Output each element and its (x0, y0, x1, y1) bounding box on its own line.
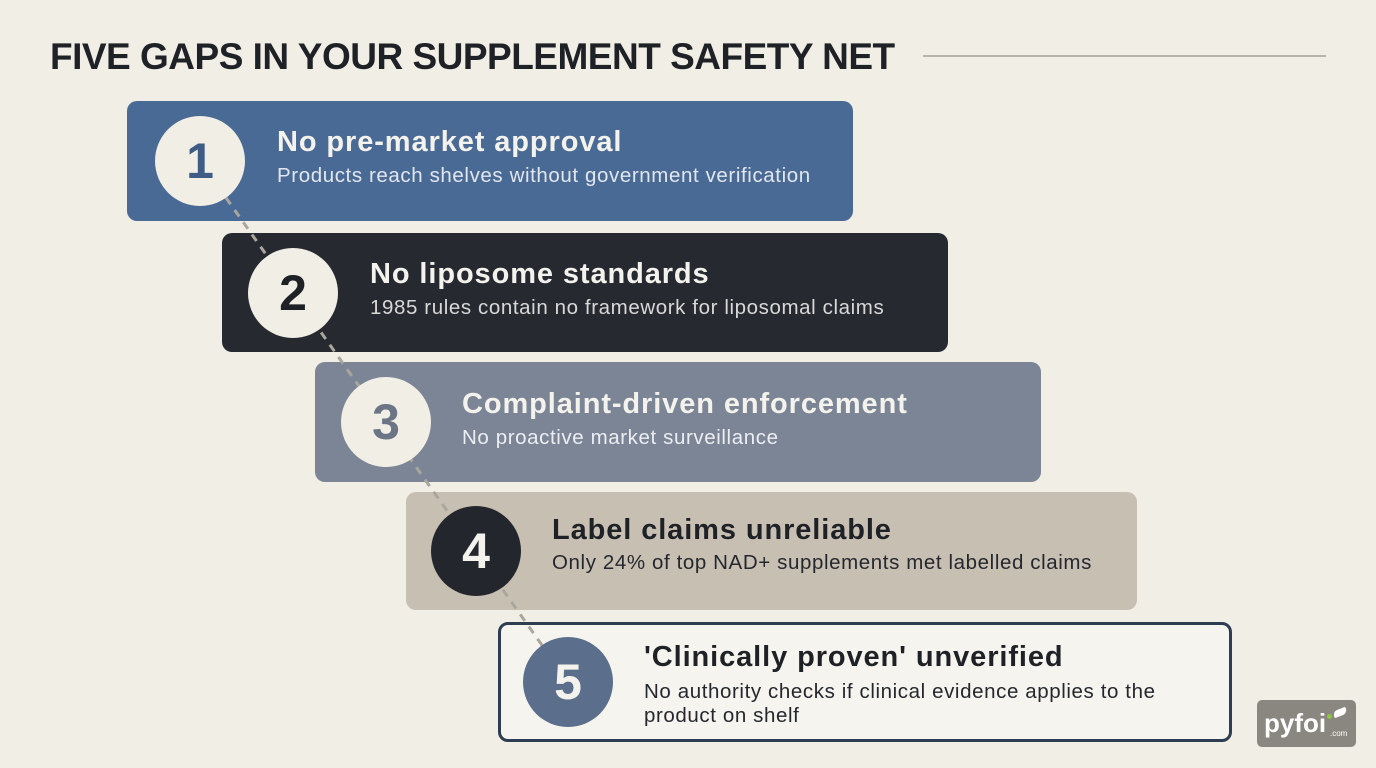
panel: gap 5 (498, 622, 1232, 742)
icon: number 4 (431, 506, 521, 596)
text 1: Products reach shelves without government verification (277, 164, 811, 187)
text 3: No proactive market surveillance (462, 426, 779, 449)
title: FIVE GAPS IN YOUR SUPPLEMENT SAFETY NET (50, 36, 895, 77)
heading 3: Complaint-driven enforcement (462, 388, 908, 420)
icon: number 3 (341, 377, 431, 467)
panel: gap 2 (222, 233, 948, 352)
panel: gap 3 (315, 362, 1041, 482)
heading 1: No pre-market approval (277, 126, 622, 158)
text 4: Only 24% of top NAD+ supplements met labelled claims (552, 551, 1092, 574)
icon: number 4: 4 (462, 523, 490, 579)
icon: number 1 (155, 116, 245, 206)
icon: number 2 (248, 248, 338, 338)
icon: number 5: 5 (554, 654, 582, 710)
text 2: 1985 rules contain no framework for liposomal claims (370, 296, 884, 319)
panel: gap 4 (406, 492, 1137, 610)
heading 2: No liposome standards (370, 258, 710, 290)
text 5: No authority checks if clinical evidence applies to the (644, 680, 1156, 703)
icon: number 5 (523, 637, 613, 727)
text 5 (644, 680, 1156, 727)
icon: number 1: 1 (186, 133, 214, 189)
text 5: product on shelf (644, 704, 799, 727)
logo: pyfoi: .com (1330, 729, 1347, 738)
heading 5: 'Clinically proven' unverified (644, 641, 1064, 673)
icon: number 3: 3 (372, 394, 400, 450)
panel: gap 1 (127, 101, 853, 221)
icon: number 2: 2 (279, 265, 307, 321)
logo: pyfoi (1257, 700, 1356, 747)
logo: pyfoi: pyfoi (1264, 708, 1326, 738)
heading 4: Label claims unreliable (552, 514, 892, 546)
